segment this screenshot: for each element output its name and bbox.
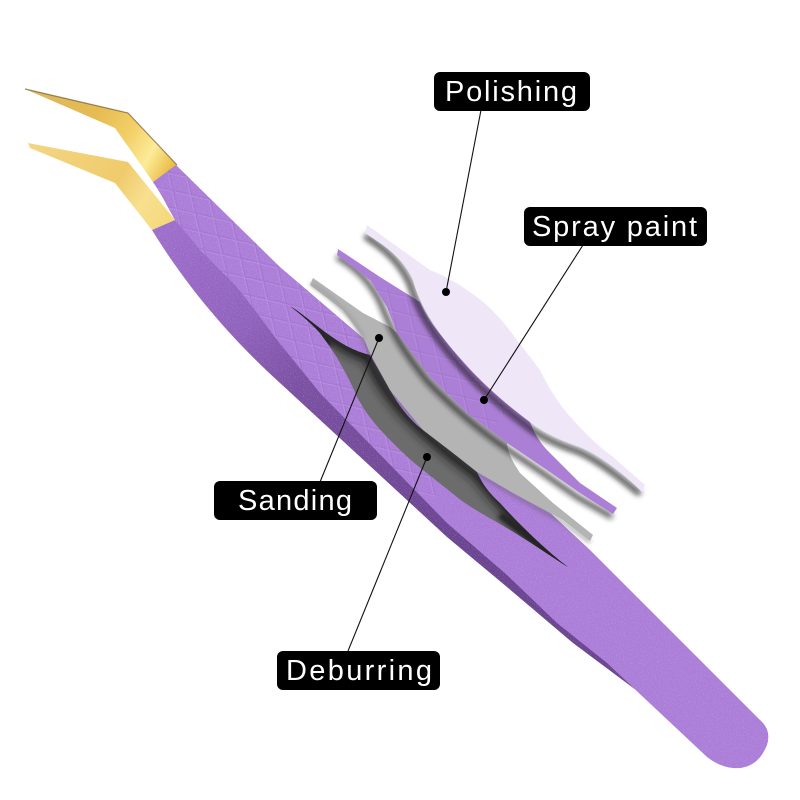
tweezer lower arm: [152, 220, 640, 693]
label: sanding: [214, 481, 377, 520]
label: deburring: Deburring: [286, 655, 432, 687]
icon: upper gold tip: [25, 89, 177, 182]
icon: lower gold tip: [28, 143, 175, 230]
layer: sanding: [310, 278, 593, 542]
label: polishing: [434, 72, 590, 111]
layer: spray paint: [337, 249, 617, 517]
leader line: polishing: [442, 110, 481, 296]
tweezer upper arm: [153, 165, 768, 768]
speckle grain on handle: [140, 160, 780, 780]
leader line: sanding: [320, 334, 383, 482]
leader line: spray paint: [480, 245, 583, 404]
diamond texture on handle: [153, 165, 470, 505]
label: spray paint: Spray paint: [532, 211, 697, 243]
layer: polishing: [365, 225, 645, 494]
layer: deburring: [290, 306, 568, 567]
label: sanding: Sanding: [238, 485, 352, 517]
label: polishing: Polishing: [445, 76, 577, 108]
leader line: deburring: [348, 453, 431, 651]
